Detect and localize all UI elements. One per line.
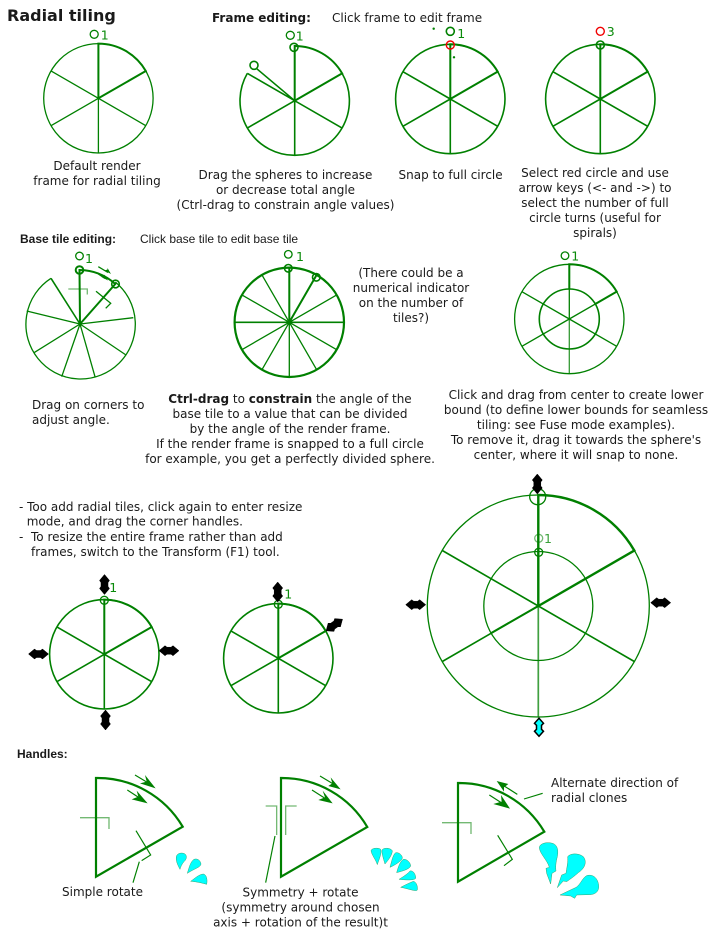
caption: full circle turns: Select red circle and use xyxy=(521,166,669,180)
caption: drag corners: Drag on corners to xyxy=(32,398,144,412)
caption: full circle turns: arrow keys (<- and ->) to xyxy=(518,181,672,195)
diagram: simple rotate tile xyxy=(80,775,207,884)
diagram: drag corners xyxy=(26,251,135,379)
caption: drag spheres: Drag the spheres to increase xyxy=(199,168,372,182)
diagram: constrained base tile: 1 xyxy=(296,249,304,264)
note: resize mode: mode, and drag the corner handles. xyxy=(27,514,243,528)
diagram: lower bound xyxy=(515,248,624,374)
caption: lower bound: bound (to define lower bounds for seamless xyxy=(444,403,708,417)
note: numerical indicator: on the number of xyxy=(359,296,464,310)
caption: lower bound: Click and drag from center to create lower xyxy=(449,388,703,402)
caption: lower bound: center, where it will snap to none. xyxy=(474,448,678,462)
diagram: full circle turns: 3 xyxy=(607,24,615,39)
caption: constrain the angle: Ctrl-drag to constrain the angle of the xyxy=(168,392,412,406)
note: resize mode: frames, switch to the Transform (F1) tool. xyxy=(31,545,280,559)
caption: alternate direction: Alternate direction of xyxy=(551,776,678,790)
diagram: drag spheres: 1 xyxy=(296,29,304,44)
caption: symmetry rotate: Symmetry + rotate xyxy=(242,886,359,900)
caption: drag spheres: (Ctrl-drag to constrain angle values) xyxy=(177,198,394,212)
instruction: click frame: Click frame to edit frame xyxy=(332,11,482,25)
note: numerical indicator: numerical indicator xyxy=(353,281,469,295)
diagram: alternate direction tile xyxy=(442,781,599,898)
diagram: drag spheres xyxy=(240,29,349,155)
caption: default render frame: Default render xyxy=(53,159,141,173)
diagram: symmetry rotate tile xyxy=(266,776,417,891)
caption: drag corners: adjust angle. xyxy=(32,413,110,427)
diagram: corner resize: 1 xyxy=(284,586,292,601)
title: Radial tiling xyxy=(7,6,116,25)
diagram: snap to full circle xyxy=(396,26,505,154)
diagram: large resize frame: 1 xyxy=(544,531,552,546)
instruction: click base tile: Click base tile to edit base tile xyxy=(140,232,298,246)
heading: handles: Handles: xyxy=(17,747,68,761)
caption: lower bound: To remove it, drag it towards the sphere's xyxy=(450,433,701,447)
caption: constrain the angle: base tile to a value that can be divided xyxy=(173,407,407,421)
note: resize mode: To resize the entire frame rather than add xyxy=(30,530,283,544)
caption: drag spheres: or decrease total angle xyxy=(216,183,355,197)
heading: base tile editing: Base tile editing: xyxy=(20,232,116,246)
caption: symmetry rotate: axis + rotation of the result)t xyxy=(213,916,388,930)
diagram: resize handles: 1 xyxy=(109,580,117,595)
caption: default render frame: frame for radial tiling xyxy=(33,174,161,188)
caption: full circle turns: circle turns (useful for xyxy=(529,211,661,225)
note: resize mode: - Too add radial tiles, click again to enter resize xyxy=(19,500,302,514)
caption: snap to full circle: Snap to full circle xyxy=(399,168,503,182)
note: numerical indicator: (There could be a xyxy=(358,266,464,280)
caption: lower bound: tiling: see Fuse mode examples). xyxy=(477,418,675,432)
diagram: resize handles xyxy=(28,574,179,730)
heading: frame editing: Frame editing: xyxy=(212,11,311,25)
diagram: full circle turns xyxy=(546,24,655,154)
caption: simple rotate: Simple rotate xyxy=(62,885,143,899)
caption: symmetry rotate: (symmetry around chosen xyxy=(221,900,380,914)
note: resize mode: - xyxy=(19,530,23,544)
diagram: large resize frame xyxy=(406,474,671,736)
caption: constrain the angle: for example, you get a perfectly divided sphere. xyxy=(145,452,435,466)
diagram: drag corners: 1 xyxy=(85,251,93,266)
caption: full circle turns: spirals) xyxy=(573,226,617,240)
diagram: snap to full circle: 1 xyxy=(457,26,465,41)
diagram: default render frame xyxy=(44,27,153,153)
caption: constrain the angle: If the render frame is snapped to a full circle xyxy=(156,437,424,451)
note: numerical indicator: tiles?) xyxy=(393,311,429,325)
caption: full circle turns: select the number of full xyxy=(521,196,669,210)
diagram: default render frame: 1 xyxy=(101,27,109,42)
caption: constrain the angle: by the angle of the render frame. xyxy=(190,422,390,436)
diagram: lower bound: 1 xyxy=(571,248,579,264)
diagram: corner resize xyxy=(224,582,345,713)
caption: alternate direction: radial clones xyxy=(551,791,627,805)
diagram: constrained base tile xyxy=(235,249,344,377)
